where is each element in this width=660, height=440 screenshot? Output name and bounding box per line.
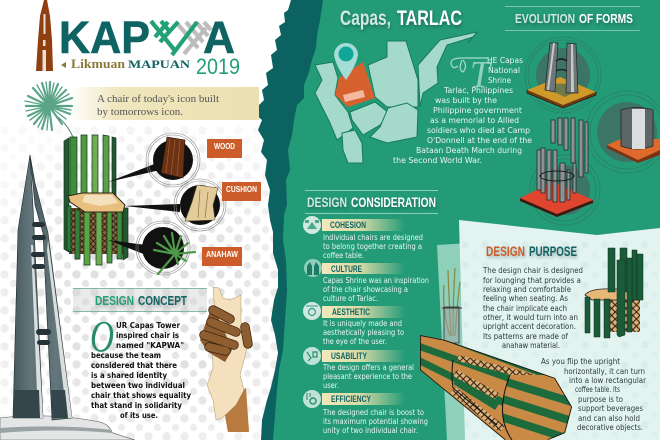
logo: subtitle Likmuan Mapuan 2019 (61, 54, 240, 79)
text block: purpose paragraph 2: horizontally, it can turn (564, 367, 645, 376)
text block: shrine paragraph: the Second World War. (393, 156, 482, 165)
text block: purpose paragraph 1: upright accent decoration. (483, 322, 576, 331)
text block: concept paragraph: between two individual (91, 381, 185, 390)
text block: purpose paragraph 2: into a low rectangular (569, 376, 647, 385)
icon: wood sample (161, 137, 185, 178)
text block: shrine paragraph: Philippine government (433, 106, 522, 115)
text block: shrine paragraph: National (488, 66, 520, 75)
text block: shrine paragraph: Bataan Death March during (416, 146, 522, 155)
item: usability: USABILITY (331, 351, 367, 362)
tower left leg (13, 155, 43, 418)
logo: KAPWA wordmark: A (203, 12, 235, 63)
item: efficiency: its maximum potential showing (323, 417, 428, 426)
chair upright slats (64, 135, 116, 252)
item: cohesion: COHESION (330, 220, 366, 231)
text block: shrine paragraph: as a memorial to Allied (430, 116, 519, 125)
text block: shrine paragraph: Shrine (488, 76, 511, 85)
upright chair illustration (585, 248, 643, 338)
item: cohesion: to belong together creating a (323, 242, 422, 251)
item: culture: CULTURE (331, 264, 362, 275)
icon: efficiency (303, 390, 321, 408)
item: efficiency: unity of two individual chair. (323, 426, 418, 435)
heading: Capas, Tarlac (340, 7, 462, 30)
callout: wood (108, 133, 242, 187)
icon: culture (304, 259, 322, 277)
text block: purpose paragraph 2: coffee table. Its (575, 385, 620, 394)
icon: hand holding wood (200, 287, 249, 432)
item: culture: of the chair showcasing a (323, 285, 408, 294)
text block: purpose paragraph 1: the chair implicate each (483, 304, 567, 313)
heading: design concept: DESIGN (95, 293, 134, 308)
icon: cushion sample (185, 185, 218, 221)
item: culture: Capas Shrine was an inspiration (323, 276, 429, 285)
vase with plants (442, 268, 462, 343)
text block: concept paragraph: considered that there (91, 361, 177, 370)
item: aesthetic: the eye of the user. (323, 337, 387, 346)
text block: purpose paragraph 1: Its patterns are made of (483, 332, 568, 341)
item: usability: The design offers a general (322, 363, 414, 372)
map of Tarlac (315, 32, 477, 163)
item: culture: culture of Tarlac. (323, 294, 378, 303)
heading: design consideration (305, 190, 438, 214)
text block: shrine paragraph: HE Capas (487, 56, 523, 65)
logo: tower mark (36, 0, 53, 71)
text block: shrine paragraph (393, 56, 532, 165)
item: efficiency (303, 390, 428, 435)
text block: concept paragraph: that stand in solidarity (91, 401, 183, 410)
text block: purpose paragraph 1: anahaw material. (502, 341, 560, 350)
text block: shrine paragraph: O'Donnell at the end of the (427, 136, 532, 145)
text block: concept paragraph: inspired chair is (116, 331, 179, 340)
text block: shrine paragraph: soldiers who died at Camp (427, 126, 530, 135)
text block: concept paragraph (91, 321, 192, 420)
callout: anahaw (108, 221, 242, 275)
text block: concept paragraph: because the team (91, 351, 161, 360)
item: cohesion: coffee table. (323, 251, 364, 260)
panel: design concept (73, 288, 207, 420)
map region: Tarlac highlighted (335, 62, 375, 107)
item: efficiency: The designed chair is boost to (322, 408, 424, 417)
heading: evolution of forms (505, 6, 640, 31)
text block: shrine paragraph: Tarlac, Philippines (443, 86, 513, 95)
label: wood: WOOD (214, 142, 235, 151)
tagline banner (70, 87, 259, 120)
text block: purpose paragraph 2: support beverages (578, 404, 643, 413)
item: aesthetic (303, 302, 405, 346)
heading: design consideration: CONSIDERATION (351, 194, 436, 210)
text block: purpose paragraph 2: and can also hold (578, 414, 640, 423)
text block: purpose paragraph 1: feeling when seating. As (483, 294, 568, 303)
label: cushion: CUSHION (226, 185, 257, 194)
item: efficiency: EFFICIENCY (331, 394, 371, 405)
text block: concept paragraph: chair that shows equality (91, 391, 192, 400)
logo: subtitle Likmuan Mapuan 2019: 2019 (196, 54, 240, 79)
icon: anahaw palm leaf (25, 82, 73, 137)
text block: concept paragraph: is a shared identity (91, 371, 168, 380)
heading: design concept: CONCEPT (138, 293, 187, 308)
icon: usability (303, 347, 321, 365)
logo: subtitle Likmuan Mapuan 2019: MAPUAN (128, 57, 190, 71)
logo: woven W mark (151, 21, 211, 55)
text block: purpose paragraph 1: other, it would turn into an (483, 313, 578, 322)
tower base steps (0, 416, 135, 440)
table illustration with vase (415, 268, 580, 440)
text block: purpose paragraph 1: relaxing and comfortable (483, 285, 571, 294)
torn edge: dark teal band (256, 0, 660, 440)
heading: evolution of forms: OF FORMS (579, 11, 633, 26)
text block: concept paragraph: UR Capas Tower (116, 321, 180, 330)
form 1 (525, 37, 601, 113)
heading: design concept (73, 288, 207, 312)
item: cohesion (303, 216, 423, 260)
halftone dots (0, 125, 280, 440)
drop cap T: T (470, 54, 493, 96)
table end cap stripes (503, 375, 572, 440)
text block: purpose paragraph 1: for lounging that provides a (483, 276, 581, 285)
item: aesthetic: aesthetically pleasing to (323, 328, 404, 337)
icon: anahaw sample (154, 233, 195, 274)
form 3 (520, 118, 600, 225)
item: cohesion: Individual chairs are designed (323, 233, 423, 242)
tagline banner: A chair of today's icon built (97, 94, 219, 105)
text block: concept paragraph: named "KAPWA" (116, 341, 184, 350)
item: aesthetic: AESTHETIC (332, 307, 370, 318)
text block: shrine paragraph: was built by the (435, 96, 497, 105)
heading: design purpose (486, 244, 577, 259)
icon: map pin (334, 43, 358, 80)
logo: KAPWA wordmark (59, 12, 235, 63)
Capas tower illustration (0, 155, 135, 440)
heading: Capas, Tarlac: Capas, (340, 7, 391, 30)
item: aesthetic: It is uniquely made and (323, 319, 402, 328)
text block: purpose paragraph 1: The design chair is designed (482, 266, 583, 275)
label: anahaw: ANAHAW (206, 250, 238, 259)
chair lower lattice and slats (69, 208, 125, 254)
horizontal table log (420, 335, 572, 440)
text block: purpose paragraph 1 (482, 266, 583, 350)
form 2 (586, 91, 660, 173)
item: usability (303, 347, 414, 390)
text block: purpose paragraph 2: decorative objects. (577, 423, 643, 432)
heading: design consideration: DESIGN (307, 194, 347, 210)
item: usability: user. (323, 381, 339, 390)
heading: Capas, Tarlac: TARLAC (397, 7, 462, 30)
heading: evolution of forms: EVOLUTION (515, 11, 575, 26)
icon: aesthetic (303, 302, 321, 320)
logo: subtitle Likmuan Mapuan 2019: Likmuan (71, 56, 126, 71)
text block: concept paragraph: of its use. (120, 411, 158, 420)
text block: purpose paragraph 2 (541, 357, 647, 432)
logo: KAPWA wordmark: KAP (59, 12, 150, 63)
callout: cushion (125, 179, 261, 231)
chair illustration (64, 135, 128, 265)
green background panel (273, 0, 660, 440)
panel: design purpose background (437, 220, 660, 440)
tower right leg (30, 155, 72, 420)
tagline banner: by tomorrows icon. (97, 107, 183, 118)
drop cap O: O (90, 312, 114, 361)
text block: purpose paragraph 2: purpose is to (578, 395, 623, 404)
item: usability: pleasant experience to the (323, 372, 412, 381)
text block: purpose paragraph 2: As you flip the upright (541, 357, 620, 366)
map regions (315, 32, 477, 163)
item: culture (304, 259, 429, 303)
drop cap T (451, 54, 493, 96)
chair seat cushion (68, 193, 125, 212)
heading: design purpose: PURPOSE (529, 244, 577, 259)
icon: cohesion (303, 216, 321, 234)
heading: design purpose: DESIGN (486, 244, 525, 259)
tower connector rings (31, 222, 51, 345)
